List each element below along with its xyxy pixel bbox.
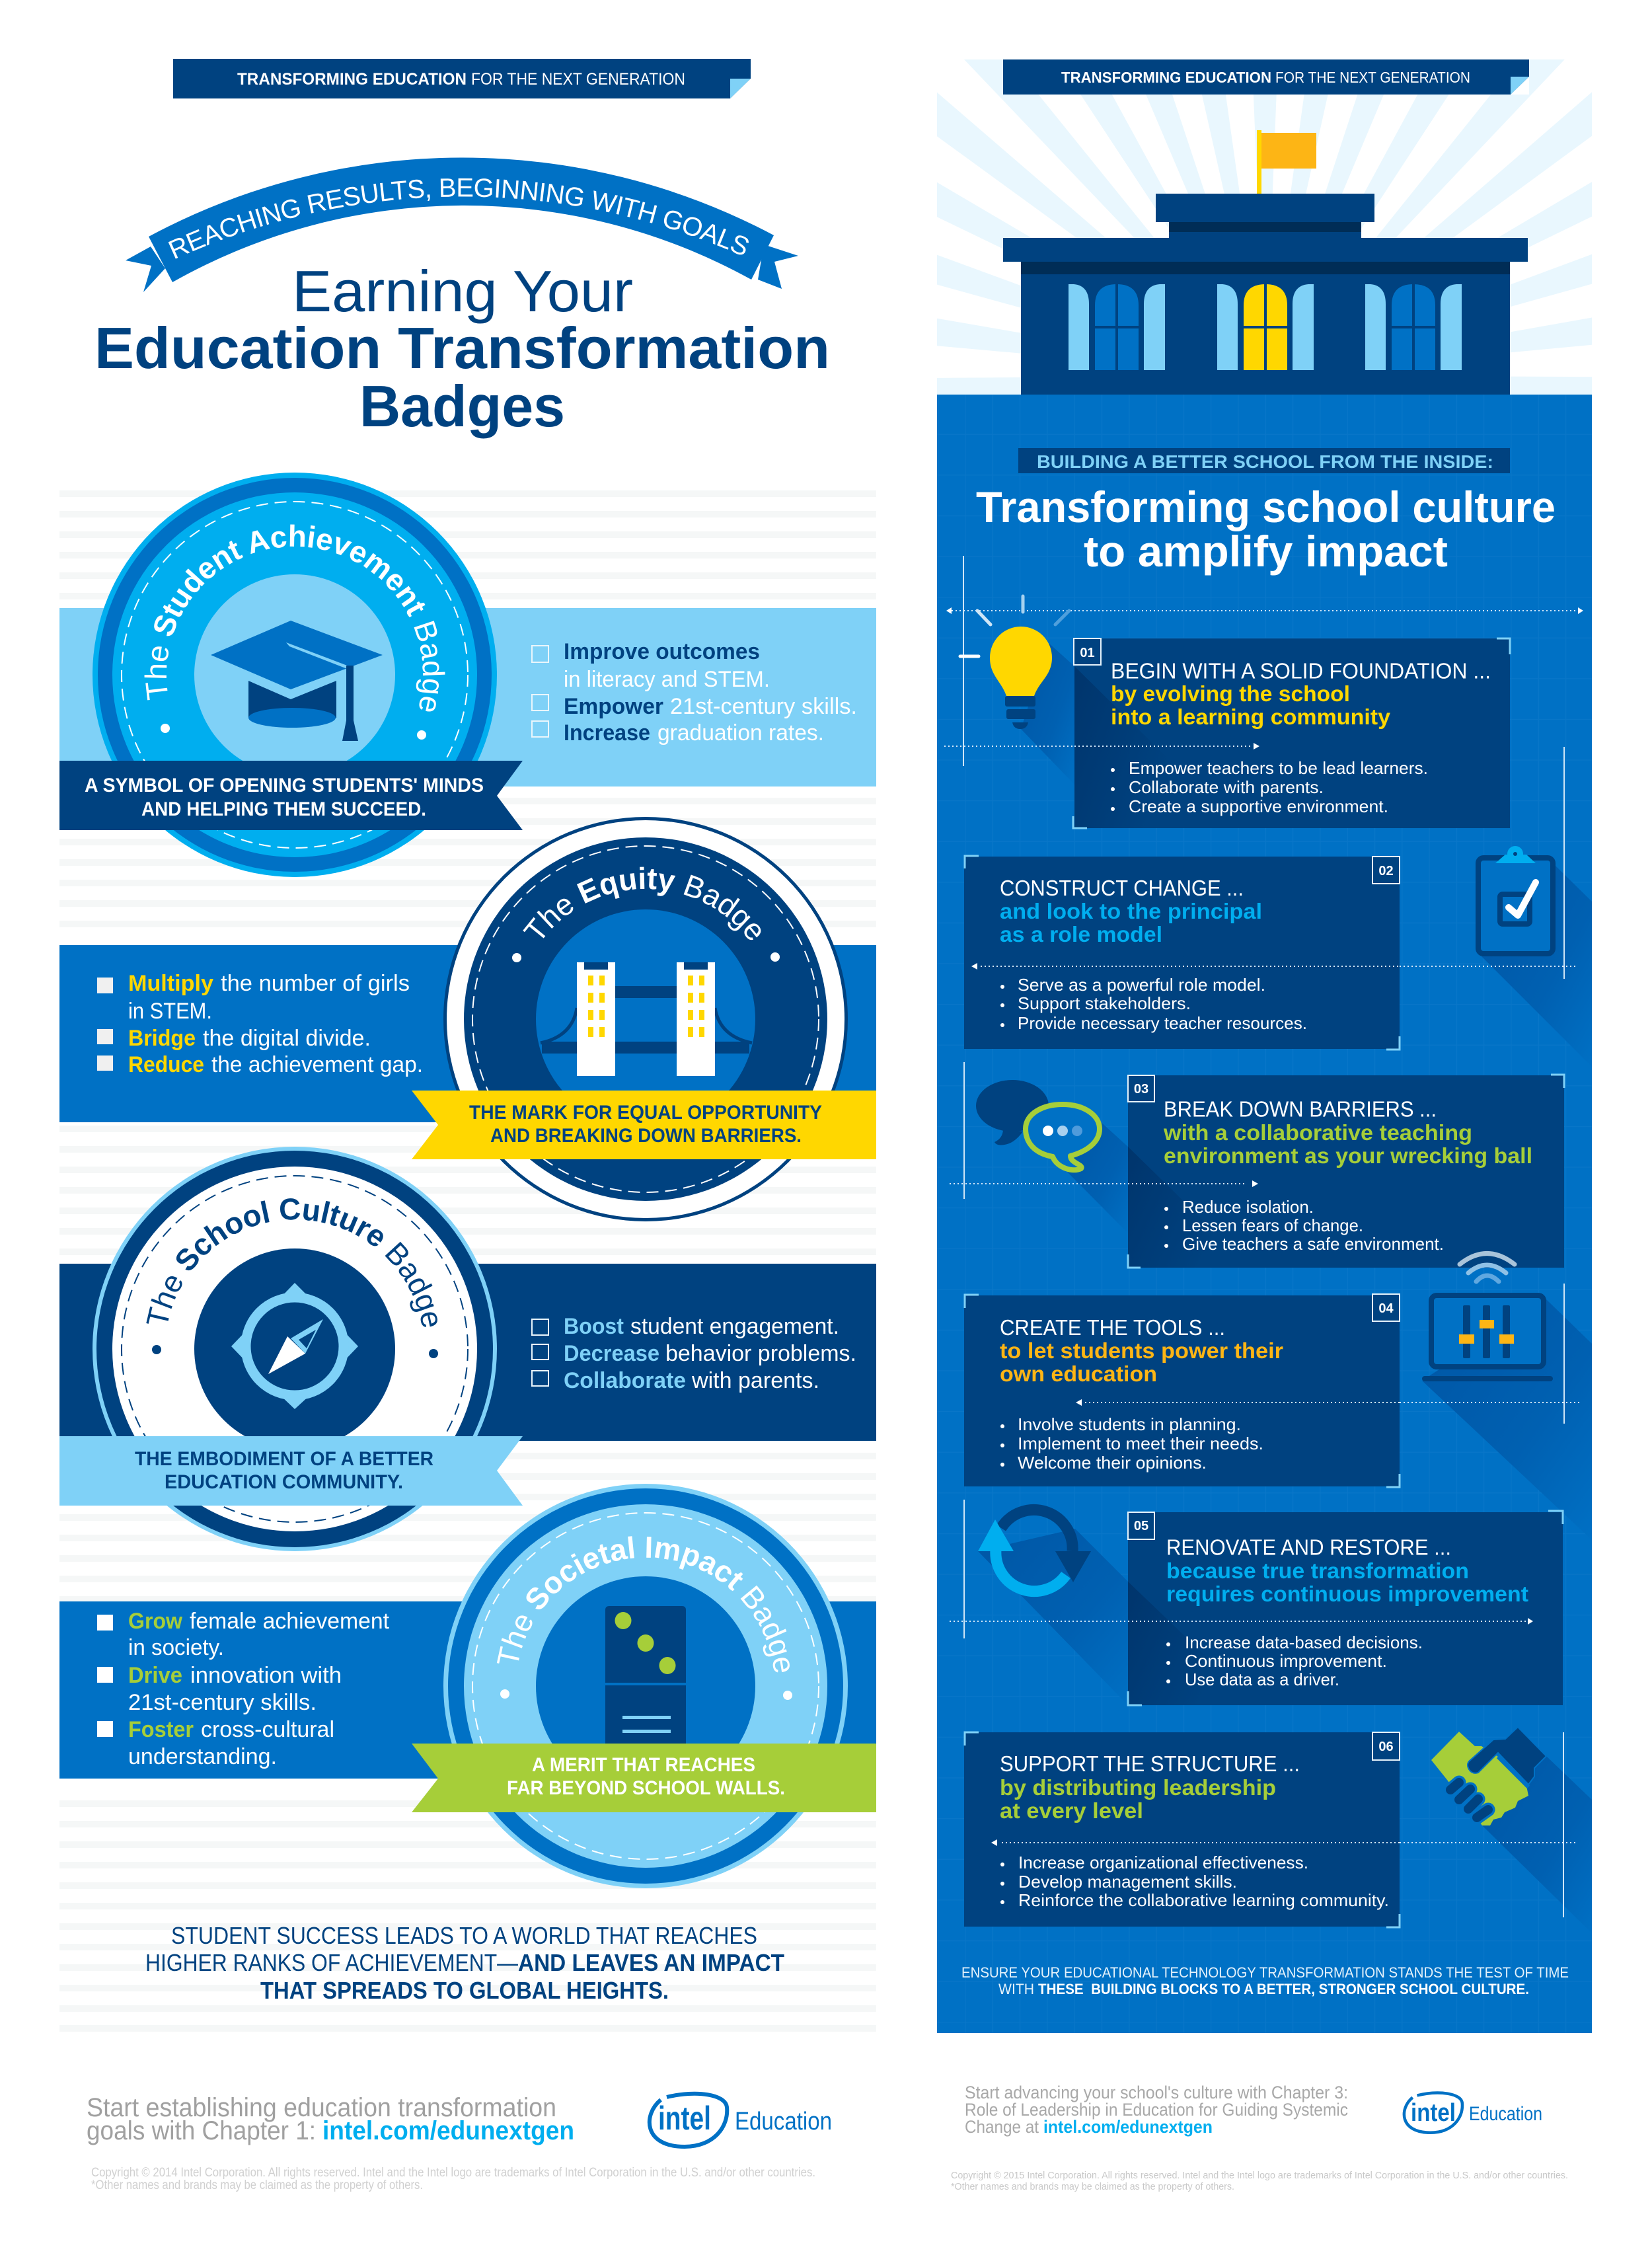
icon: wifi laptop with sliders (1422, 1253, 1553, 1381)
panel: school culture list background (59, 1264, 876, 1441)
curved ribbon heading: REACHING RESULTS, BEGINNING WITH GOALS (168, 178, 749, 259)
icon shadows (978, 643, 1592, 1933)
card 05: renovate and restore (1128, 1511, 1563, 1705)
card 05: renovate and restore: Use data as a driver. (1185, 1670, 1339, 1689)
windows: right (1365, 284, 1462, 370)
card 02: construct change: CONSTRUCT CHANGE ... (1000, 876, 1244, 900)
banner: embodiment of a better education community (59, 1436, 523, 1506)
badge: societal impact (443, 1484, 848, 1888)
icon: handshake (1431, 1727, 1546, 1825)
copyright: left: Copyright © 2014 Intel Corporation. All rights reserved. Intel and the Intel logo are trademarks of Intel Corporation in the U.S. and/or other countries. (91, 2166, 815, 2180)
card 05: renovate and restore: Increase data-based decisions. (1185, 1632, 1423, 1652)
footer call to action: left: intel.com/edunextgen (322, 2116, 574, 2145)
list: equity: in STEM. (128, 999, 212, 1024)
list: equity: Bridge (128, 1026, 196, 1051)
list: student achievement: 21st-century skills. (670, 694, 857, 719)
list: student achievement: Empower (564, 694, 663, 719)
card 06: support the structure: Increase organizational effectiveness. (1018, 1853, 1308, 1872)
card 01: solid foundation: Create a supportive environment. (1129, 796, 1388, 816)
copyright: left (91, 2166, 815, 2192)
left header banner: FOR THE NEXT GENERATION (471, 70, 685, 89)
title: Education Transformation (94, 315, 830, 381)
banner: mark for equal opportunity: AND BREAKING DOWN BARRIERS. (490, 1125, 802, 1147)
windows: center lit (1217, 284, 1314, 370)
title: Badges (359, 373, 565, 439)
card 01: solid foundation: Empower teachers to be lead learners. (1129, 758, 1428, 778)
list: equity: the digital divide. (203, 1026, 371, 1051)
banner: symbol of opening minds (59, 761, 523, 830)
closing statement: THAT SPREADS TO GLOBAL HEIGHTS. (260, 1977, 669, 2004)
card 04: create the tools: 04 (1378, 1301, 1394, 1316)
icon: bridge (541, 962, 752, 1076)
card 02: construct change (964, 856, 1400, 1050)
left header banner: TRANSFORMING EDUCATION (237, 70, 467, 89)
list: student achievement: in literacy and STEM. (564, 667, 770, 692)
icon: graduation cap (211, 621, 383, 741)
banner: symbol of opening minds: A SYMBOL OF OPENING STUDENTS' MINDS (85, 775, 484, 796)
list: societal impact: innovation with (190, 1663, 342, 1688)
card 03: break down barriers: Give teachers a safe environment. (1182, 1234, 1444, 1254)
card 02: construct change: as a role model (1000, 922, 1162, 946)
card 04: create the tools (964, 1294, 1400, 1487)
banner: embodiment of a better education community: EDUCATION COMMUNITY. (165, 1471, 403, 1493)
right header banner: TRANSFORMING EDUCATION (1061, 69, 1271, 86)
card 01: solid foundation (1073, 638, 1510, 828)
card 03: break down barriers: BREAK DOWN BARRIERS ... (1164, 1097, 1437, 1121)
illustration: school building (1003, 130, 1528, 395)
list: societal impact: Drive (128, 1663, 182, 1688)
card 03: break down barriers: with a collaborative teaching (1163, 1120, 1472, 1145)
list: student achievement: graduation rates. (657, 720, 824, 746)
badge: school culture: The School Culture Badge (146, 1198, 437, 1327)
icon: clipboard (1478, 846, 1553, 954)
list: societal impact: Grow (128, 1609, 183, 1634)
list: school culture: Boost (564, 1314, 624, 1339)
copyright: right (951, 2170, 1568, 2192)
card 06: support the structure: at every level (1000, 1798, 1143, 1823)
card 06: support the structure: Develop management skills. (1018, 1872, 1237, 1892)
list: equity (97, 971, 423, 1077)
list: societal impact: in society. (128, 1635, 224, 1660)
card 03: break down barriers: Reduce isolation. (1182, 1197, 1314, 1217)
card 04: create the tools: Involve students in planning. (1018, 1414, 1241, 1434)
windows: left (1069, 284, 1165, 370)
title: Earning Your (292, 258, 633, 324)
list: school culture: behavior problems. (665, 1341, 856, 1366)
list: student achievement: Improve outcomes (564, 639, 760, 664)
icon: renewal cycle arrows (978, 1510, 1091, 1592)
card 01: solid foundation: by evolving the school (1111, 681, 1350, 706)
copyright: left: *Other names and brands may be claimed as the property of others. (91, 2178, 423, 2192)
list: student achievement: Increase (564, 720, 650, 746)
card 03: break down barriers (1128, 1075, 1564, 1268)
card 04: create the tools: own education (1000, 1362, 1157, 1386)
card 06: support the structure: 06 (1378, 1740, 1394, 1754)
blueprint lines (944, 556, 1583, 1917)
panel: equity list background (59, 945, 876, 1122)
footer call to action: right (965, 2083, 1348, 2137)
card 06: support the structure: SUPPORT THE STRUCTURE ... (1000, 1751, 1300, 1776)
footer call to action: left: Start establishing education transformation (87, 2093, 556, 2122)
footer call to action: left (87, 2093, 574, 2145)
list: equity: the number of girls (221, 971, 410, 996)
card 03: break down barriers: environment as your wrecking ball (1164, 1143, 1532, 1168)
list: student achievement (532, 639, 857, 746)
icon: compass (231, 1283, 358, 1409)
card 02: construct change: and look to the principal (1000, 899, 1262, 923)
banner: embodiment of a better education community: THE EMBODIMENT OF A BETTER (135, 1448, 433, 1470)
list: school culture (532, 1314, 856, 1393)
badge: school culture (93, 1147, 497, 1551)
card 05: renovate and restore: requires continuous improvement (1166, 1582, 1528, 1606)
copyright: right: Copyright © 2015 Intel Corporation. All rights reserved. Intel and the Intel logo are trademarks of Intel Corporation in the U.S. and/or other countries. (951, 2170, 1568, 2181)
card 04: create the tools: CREATE THE TOOLS ... (1000, 1315, 1225, 1340)
closing statement: right: THESE BUILDING BLOCKS TO A BETTER, STRONGER SCHOOL CULTURE. (1038, 1981, 1529, 1997)
closing statement: right (961, 1964, 1569, 1997)
card 02: construct change: Serve as a powerful role model. (1018, 975, 1265, 995)
heading: transforming school culture (976, 482, 1556, 576)
list: societal impact: Foster (128, 1717, 194, 1742)
footer call to action: right: Role of Leadership in Education for Guiding Systemic (965, 2100, 1348, 2120)
banner: merit beyond school walls: A MERIT THAT REACHES (532, 1754, 755, 1776)
card 05: renovate and restore: RENOVATE AND RESTORE ... (1166, 1535, 1451, 1560)
card 01: solid foundation: Collaborate with parents. (1129, 777, 1324, 797)
logo: intel education left (650, 2094, 832, 2147)
icon: domino (605, 1606, 686, 1751)
icon: light bulb (960, 596, 1069, 729)
card 05: renovate and restore: because true transformation (1166, 1558, 1469, 1583)
card 04: create the tools: Implement to meet their needs. (1018, 1434, 1263, 1453)
card 04: create the tools: Welcome their opinions. (1018, 1453, 1207, 1473)
icon: speech bubbles (976, 1080, 1100, 1170)
background stripes: left column (59, 490, 876, 2032)
card 01: solid foundation: BEGIN WITH A SOLID FOUNDATION ... (1111, 658, 1491, 683)
panel: right blue background (937, 395, 1592, 2033)
list: equity: the achievement gap. (211, 1052, 423, 1077)
heading: transforming school culture: Transforming school culture (976, 482, 1556, 531)
closing statement: STUDENT SUCCESS LEADS TO A WORLD THAT REACHES (171, 1922, 757, 1949)
card 01: solid foundation: into a learning community (1111, 705, 1391, 729)
list: school culture: with parents. (691, 1368, 819, 1393)
title (94, 258, 830, 439)
closing statement: AND LEAVES AN IMPACT (518, 1949, 784, 1976)
list: societal impact (97, 1609, 390, 1769)
card 05: renovate and restore: 05 (1134, 1519, 1148, 1533)
badge: equity (443, 817, 848, 1221)
list: equity: Multiply (128, 971, 213, 996)
list: school culture: Collaborate (564, 1368, 686, 1393)
card 04: create the tools: to let students power their (1000, 1338, 1283, 1363)
logo: intel education left: intel (658, 2100, 711, 2137)
closing statement: right: ENSURE YOUR EDUCATIONAL TECHNOLOGY TRANSFORMATION STANDS THE TEST OF TIME (961, 1964, 1569, 1981)
footer call to action: left: goals with Chapter 1: (87, 2116, 316, 2145)
list: societal impact: understanding. (128, 1744, 277, 1769)
list: school culture: Decrease (564, 1341, 659, 1366)
banner: merit beyond school walls: FAR BEYOND SCHOOL WALLS. (507, 1777, 785, 1799)
card 06: support the structure: by distributing leadership (1000, 1775, 1276, 1800)
badge: student achievement (93, 473, 497, 877)
logo: intel education left: Education (735, 2108, 832, 2135)
list: societal impact: 21st-century skills. (128, 1690, 317, 1715)
card 02: construct change: Support stakeholders. (1018, 993, 1191, 1013)
list: equity: Reduce (128, 1052, 204, 1077)
background sunburst rays (937, 59, 1592, 395)
heading: transforming school culture: to amplify impact (1084, 527, 1448, 576)
left header banner (173, 59, 751, 98)
card 03: break down barriers: 03 (1134, 1082, 1148, 1096)
card 06: support the structure (964, 1732, 1400, 1927)
right header banner: FOR THE NEXT GENERATION (1275, 69, 1470, 86)
logo: intel education right (1404, 2093, 1542, 2133)
closing statement (145, 1922, 784, 2004)
list: societal impact: female achievement (190, 1609, 390, 1634)
footer call to action: right: Start advancing your school's culture with Chapter 3: (965, 2083, 1348, 2102)
logo: intel education right: intel (1411, 2099, 1456, 2127)
list: school culture: student engagement. (630, 1314, 839, 1339)
card 02: construct change: 02 (1378, 864, 1394, 878)
card 05: renovate and restore: Continuous improvement. (1185, 1651, 1387, 1671)
banner: symbol of opening minds: AND HELPING THEM SUCCEED. (141, 798, 426, 820)
panel: student achievement list background (59, 608, 876, 787)
curved ribbon heading (126, 157, 798, 292)
list: societal impact: cross-cultural (201, 1717, 334, 1742)
panel: societal impact list background (59, 1601, 876, 1779)
card 01: solid foundation: 01 (1080, 646, 1095, 660)
footer call to action: right: Change at (965, 2117, 1039, 2137)
banner: merit beyond school walls (412, 1744, 876, 1812)
banner: mark for equal opportunity: THE MARK FOR EQUAL OPPORTUNITY (469, 1102, 822, 1124)
logo: intel education right: Education (1469, 2103, 1542, 2125)
badge: equity: The Equity Badge (523, 867, 761, 940)
banner: mark for equal opportunity (412, 1091, 876, 1159)
card 03: break down barriers: Lessen fears of change. (1182, 1215, 1363, 1235)
copyright: right: *Other names and brands may be claimed as the property of others. (951, 2181, 1234, 2192)
closing statement: HIGHER RANKS OF ACHIEVEMENT— (145, 1949, 518, 1976)
footer call to action: right: intel.com/edunextgen (1043, 2117, 1213, 2137)
closing statement: right: WITH (998, 1981, 1034, 1997)
card 06: support the structure: Reinforce the collaborative learning community. (1018, 1890, 1389, 1910)
badge: societal impact: The Societal Impact Badge (497, 1536, 790, 1672)
subheading bar: BUILDING A BETTER SCHOOL FROM THE INSIDE: (1037, 451, 1493, 472)
right header banner (1003, 59, 1529, 95)
card 02: construct change: Provide necessary teacher resources. (1018, 1013, 1307, 1033)
badge: student achievement: The Student Achievement Badge (144, 525, 445, 711)
